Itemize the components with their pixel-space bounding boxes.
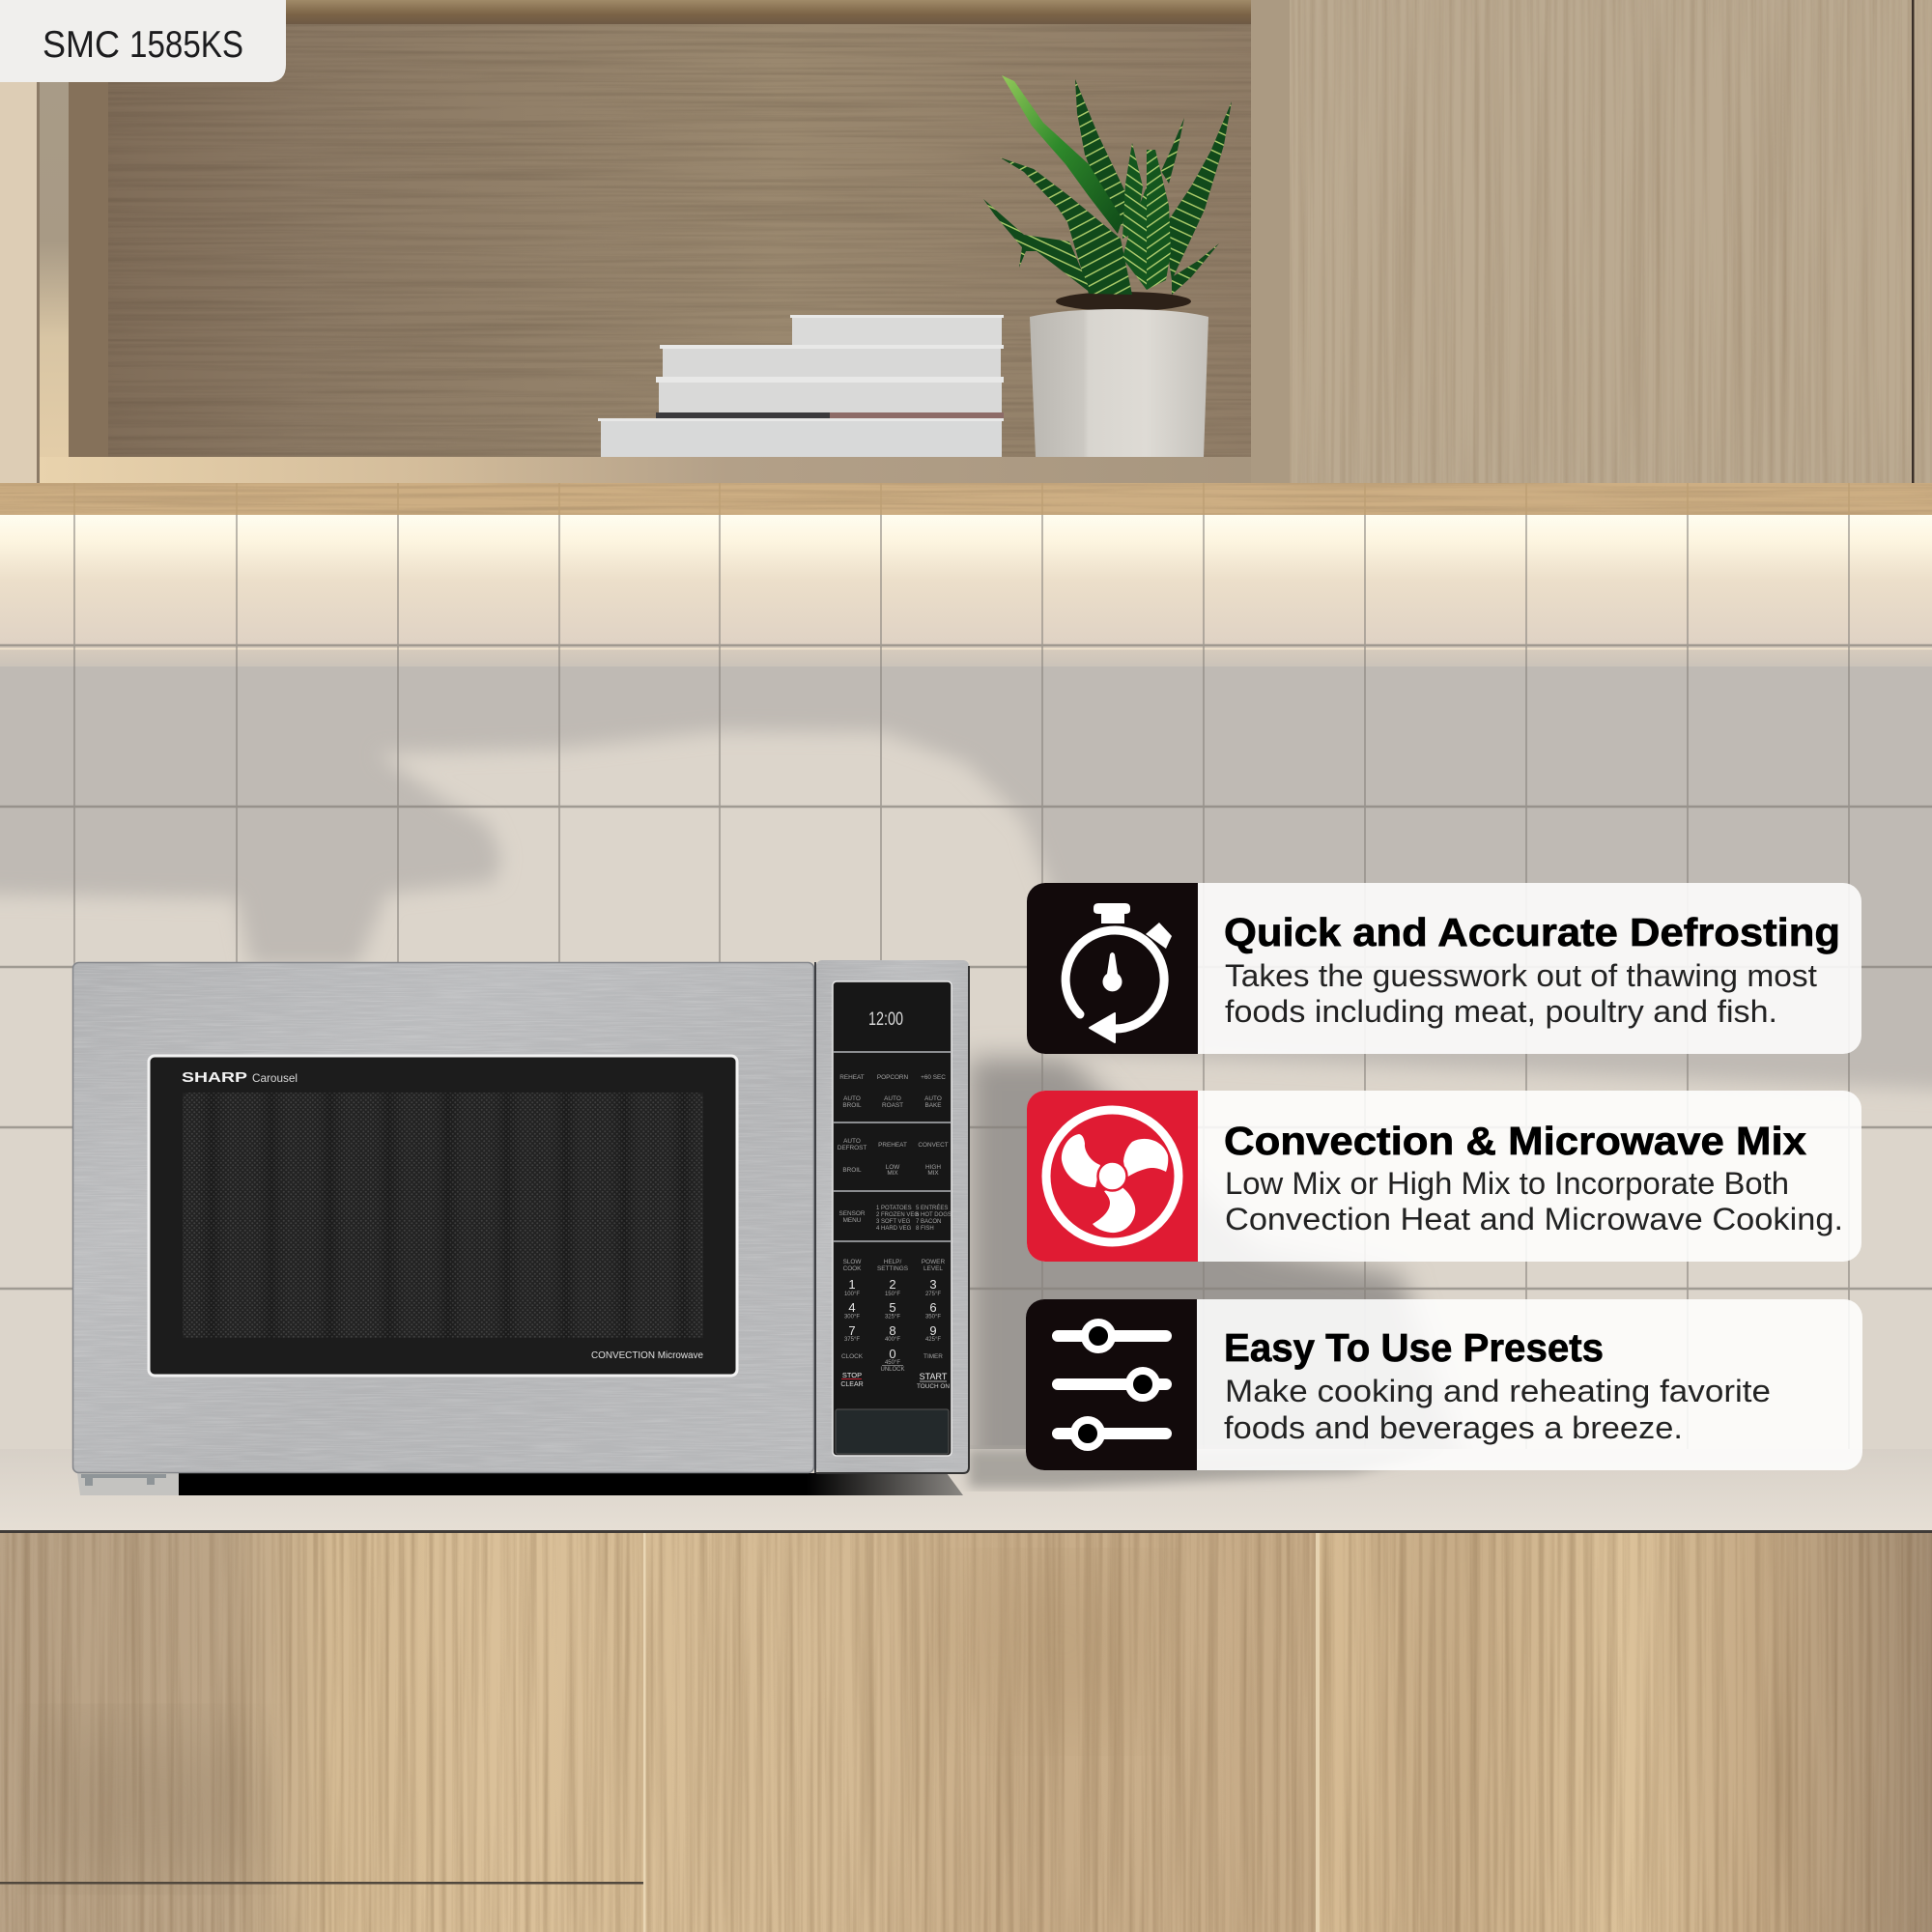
keypad labels: 300°F (844, 1314, 860, 1320)
keypad labels: SENSOR (838, 1210, 866, 1217)
keypad labels: SLOW (843, 1259, 862, 1265)
brand label (182, 1070, 298, 1086)
tile lit band (0, 515, 1932, 645)
under-cabinet wood trim (0, 483, 1932, 515)
soil (1056, 292, 1191, 311)
model number (43, 24, 243, 66)
keypad labels: 8 FISH (916, 1226, 934, 1232)
keypad labels: +60 SEC (921, 1074, 946, 1081)
mesh (183, 1093, 703, 1338)
cabinet door (1290, 0, 1932, 483)
left cabinet end panel (0, 0, 37, 483)
card background (1027, 1091, 1861, 1262)
description (1225, 958, 1817, 1029)
keypad labels: BROIL (842, 1167, 862, 1174)
shelf recess back wall (69, 0, 1251, 457)
keypad labels: 9 (929, 1323, 937, 1338)
description: Low Mix or High Mix to Incorporate Both (1225, 1166, 1789, 1201)
icon tile (1026, 1299, 1197, 1470)
leveling bracket (81, 1474, 166, 1486)
card background (1026, 1299, 1862, 1470)
cabinet door left (0, 1533, 643, 1932)
keypad labels: CLEAR (840, 1381, 864, 1388)
keypad labels: 450°F (885, 1360, 900, 1366)
tile lower field (0, 580, 1932, 1452)
keypad labels: HIGH (925, 1164, 941, 1171)
cabinet door right (1320, 1533, 1932, 1932)
keypad labels: 0 (889, 1347, 896, 1361)
model number: 1585KS (129, 24, 243, 66)
drawer seam (0, 1882, 643, 1884)
feature card: defrosting (1027, 883, 1861, 1054)
keypad labels: 325°F (885, 1314, 900, 1320)
icon: stopwatch (1065, 903, 1172, 1042)
decor: stacked books (598, 315, 1004, 457)
lower wood cabinets (0, 1533, 1932, 1932)
keypad labels: 350°F (925, 1314, 941, 1320)
keypad labels: 100°F (844, 1292, 860, 1297)
door window (149, 1056, 737, 1376)
recess left side (69, 24, 108, 457)
model type label: CONVECTION Microwave (591, 1350, 703, 1361)
keypad labels: MIX (927, 1170, 939, 1177)
cast shadows on tiles (0, 618, 1932, 1478)
brand label: Carousel (252, 1071, 298, 1085)
heading: Quick and Accurate Defrosting (1224, 910, 1840, 954)
tile grout lines (0, 515, 1932, 1300)
keypad labels: 7 (848, 1323, 856, 1338)
keypad labels: ROAST (882, 1102, 903, 1109)
countertop (0, 1449, 1932, 1534)
card background (1027, 883, 1861, 1054)
decor: potted aloe plant (983, 75, 1232, 457)
upper cabinet (0, 0, 1932, 483)
microwave oven (72, 960, 969, 1495)
keypad labels: POPCORN (877, 1074, 909, 1081)
description: foods including meat, poultry and fish. (1225, 994, 1777, 1029)
keypad labels (838, 1074, 952, 1390)
front door panel (72, 962, 814, 1473)
clock display: 12:00 (868, 1009, 903, 1030)
icon: sliders (1058, 1322, 1166, 1447)
keypad labels: 5 ENTRÉES (916, 1205, 948, 1211)
model number: SMC (43, 24, 120, 66)
keypad labels: UNLOCK (880, 1367, 905, 1373)
under-microwave shadow left (77, 1473, 179, 1495)
description: Make cooking and reheating favorite (1225, 1374, 1771, 1408)
model label tab (0, 0, 286, 82)
keypad labels: 6 HOT DOGS (916, 1212, 952, 1218)
bottom handle window (836, 1409, 949, 1454)
keypad labels: 7 BACON (916, 1219, 941, 1225)
keypad labels: HELP/ (884, 1259, 901, 1265)
keypad labels: CLOCK (841, 1353, 864, 1360)
keypad labels: COOK (843, 1265, 862, 1272)
keypad labels: 275°F (925, 1292, 941, 1297)
heading: Easy To Use Presets (1224, 1325, 1604, 1370)
description (1224, 1374, 1771, 1445)
keypad labels: MENU (843, 1217, 862, 1224)
description (1225, 1166, 1843, 1236)
keypad labels: REHEAT (839, 1074, 865, 1081)
keypad labels: 4 HARD VEG (876, 1226, 912, 1232)
keypad labels: 4 (848, 1300, 856, 1315)
keypad labels: 3 (929, 1277, 937, 1292)
description: Takes the guesswork out of thawing most (1225, 958, 1817, 993)
keypad labels: 3 SOFT VEG (876, 1219, 911, 1225)
keypad labels: STOP (842, 1371, 862, 1379)
feature card: convection (1027, 1091, 1861, 1262)
keypad dividers (834, 1052, 951, 1241)
keypad labels: 2 (889, 1277, 896, 1292)
keypad labels: 400°F (885, 1337, 900, 1343)
keypad labels: 425°F (925, 1337, 941, 1343)
keypad labels: AUTO (884, 1095, 901, 1102)
frame right (1251, 0, 1290, 483)
keypad labels: AUTO (843, 1095, 861, 1102)
keypad labels: 5 (889, 1300, 896, 1315)
pot (1030, 309, 1208, 457)
keypad labels: LOW (886, 1164, 900, 1171)
keypad labels: 8 (889, 1323, 896, 1338)
keypad labels: PREHEAT (878, 1142, 907, 1149)
description: foods and beverages a breeze. (1224, 1410, 1683, 1445)
keypad labels: DEFROST (838, 1145, 867, 1151)
keypad labels: 150°F (885, 1292, 900, 1297)
under-microwave shadow (179, 1473, 963, 1495)
icon tile (1027, 883, 1198, 1054)
keypad labels: 375°F (844, 1337, 860, 1343)
recess top (69, 0, 1251, 24)
keypad labels: SETTINGS (877, 1265, 908, 1272)
keypad labels: 6 (929, 1300, 937, 1315)
control panel (814, 960, 969, 1473)
shelf ledge (40, 457, 1290, 483)
keypad labels: 2 FROZEN VEG (876, 1212, 919, 1218)
keypad labels: TOUCH ON (917, 1383, 950, 1390)
keypad labels: 1 POTATOES (876, 1206, 912, 1211)
shelf frame left (40, 0, 69, 483)
heading: Convection & Microwave Mix (1224, 1119, 1806, 1163)
keypad labels: 1 (848, 1277, 856, 1292)
keypad labels: START (920, 1372, 948, 1381)
keypad labels: MIX (887, 1170, 898, 1177)
icon: fan (1046, 1110, 1179, 1242)
keypad labels: AUTO (924, 1095, 942, 1102)
tile reflection strip (0, 645, 1932, 667)
description: Convection Heat and Microwave Cooking. (1225, 1202, 1843, 1236)
keypad face (833, 981, 952, 1456)
keypad labels: POWER (922, 1259, 945, 1265)
keypad labels: AUTO (843, 1138, 861, 1145)
icon tile (1027, 1091, 1198, 1262)
keypad labels: BROIL (842, 1102, 862, 1109)
keypad labels: BAKE (924, 1102, 942, 1109)
plant leaves (983, 75, 1232, 295)
feature card: presets (1026, 1299, 1862, 1470)
tiled backsplash (0, 515, 1932, 1478)
keypad labels: LEVEL (923, 1265, 943, 1272)
brand label: SHARP (182, 1070, 247, 1086)
keypad labels: TIMER (923, 1353, 943, 1360)
keypad labels: CONVECT (918, 1142, 949, 1149)
cabinet door middle (643, 1533, 1316, 1932)
